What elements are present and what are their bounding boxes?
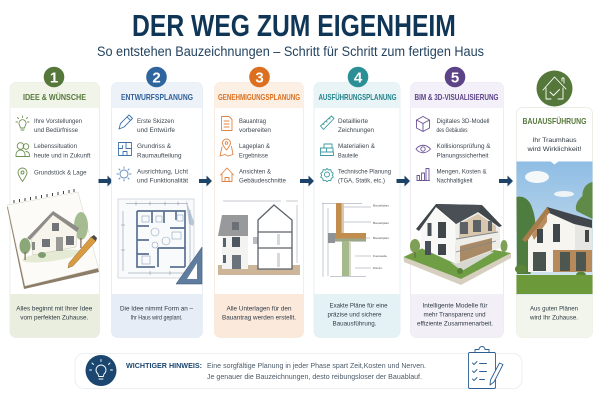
caption: vom perfekten Zuhause.	[20, 314, 88, 322]
step number 4: 4	[354, 70, 363, 86]
step number 1	[44, 67, 64, 87]
text: Grundriss: Grundriss &	[137, 143, 171, 150]
text: Traumhaus	[526, 137, 582, 153]
icon: bar chart	[417, 168, 430, 180]
caption: effiziente Zusammenarbeit.	[417, 320, 493, 328]
heading: GENEHMIGUNGSPLANUNG	[218, 93, 300, 102]
label: WICHTIGER HINWEIS:	[126, 361, 202, 370]
icon: light bulb badge	[86, 355, 116, 386]
step number 3	[249, 67, 270, 87]
illustration: sketchbook with house	[7, 189, 99, 289]
arrow 4 to 5	[396, 176, 410, 186]
caption: wird Ihr Zuhause.	[529, 314, 578, 322]
text: Mengen: Mengen, Kosten &	[436, 168, 487, 175]
icon: pencil	[119, 115, 132, 129]
icon: map pin	[220, 139, 233, 156]
panel: step 2 Entwurfsplanung: Raumaufteilung	[137, 152, 182, 159]
note text: Eine sorgfältige Planung in jeder Phase spart Zeit,Kosten und Nerven.	[207, 361, 426, 370]
illustration: 3D house model	[404, 204, 511, 285]
panel: step 2 Entwurfsplanung: und Entwürfe	[137, 127, 175, 134]
illustration: elevation and section	[218, 201, 300, 275]
panel: step 2 Entwurfsplanung	[112, 67, 202, 337]
note text: Je genauer die Bauzeichnungen, desto reibungsloser der Bauablauf.	[207, 372, 422, 381]
caption	[222, 306, 296, 322]
panel: step 2 Entwurfsplanung: und Funktionalität	[137, 178, 188, 184]
caption: Intelligente Modelle für	[422, 302, 488, 310]
icon: ruler	[320, 116, 334, 130]
text: Bauantrag: Bauantrag	[239, 118, 266, 125]
arrow 2 to 3	[199, 176, 212, 186]
text: Vorstellungen: Ihre Vorstellungen	[34, 118, 82, 125]
caption: mehr Transparenz und	[424, 312, 486, 318]
arrow 5 to 6	[499, 176, 513, 186]
illustration: construction detail	[322, 203, 389, 277]
icon: light bulb	[16, 116, 29, 130]
illustration: construction detail: Fassade	[373, 254, 387, 258]
step number 2: 2	[152, 70, 161, 86]
caption: präzise und sichere	[328, 312, 382, 318]
icon: location pin	[18, 168, 27, 182]
icon: clipboard checklist	[468, 346, 503, 388]
panel: step 3 Genehmigungsplanung: Gebäudeschnitte	[239, 178, 286, 184]
caption: Bauantrag werden erstellt.	[222, 314, 296, 322]
panel: step 4 Ausführungsplanung	[314, 67, 400, 337]
caption: Alle Unterlagen für den	[226, 306, 292, 312]
callout: Wichtiger Hinweis	[75, 346, 522, 388]
text: Materialien: Materialien &	[338, 143, 375, 150]
panel: step 4 Ausführungsplanung: Zeichnungen	[338, 127, 374, 134]
icon: people	[16, 143, 30, 156]
caption: Aus guten Plänen	[530, 306, 578, 312]
icon: document	[222, 116, 232, 130]
photo: finished house	[515, 162, 592, 295]
caption: Alles beginnt mit Ihrer Idee	[16, 306, 92, 312]
panel: step 4 Ausführungsplanung: (TGA, Statik, etc.)	[338, 178, 385, 184]
note text	[207, 361, 426, 381]
text: Traumhaus: wird Wirklichkeit!	[526, 146, 582, 153]
panel: Bauausführung	[515, 70, 592, 338]
heading: AUSFÜHRUNGSPLANUNG	[318, 92, 396, 102]
icon: floor plan	[118, 142, 132, 156]
subtitle: So entstehen Bauzeichnungen – Schritt für Schritt zum fertigen Haus	[97, 44, 484, 59]
text: 3D-Modell: Digitales 3D-Modell	[436, 118, 490, 125]
text: Ansichten: Ansichten &	[239, 168, 271, 175]
illustration: blueprint floor plan	[118, 199, 202, 284]
pointer notch	[550, 161, 559, 164]
caption: Bauausführung.	[332, 320, 377, 328]
text: Traumhaus: Ihr Traumhaus	[532, 137, 577, 144]
step number 3: 3	[255, 70, 264, 86]
text: Detaillierte: Detaillierte	[338, 118, 368, 125]
panel: step 1 Idee und Wünsche: und Bedürfnisse	[34, 127, 78, 134]
heading: BIM & 3D-VISUALISIERUNG	[414, 93, 498, 102]
heading: ENTWURFSPLANUNG	[121, 93, 193, 102]
arrow 1 to 2	[98, 176, 113, 186]
panel: step 3 Genehmigungsplanung	[214, 67, 304, 337]
caption	[417, 302, 493, 328]
illustration: construction detail: Dämm.	[373, 266, 383, 270]
panel: step 4 Ausführungsplanung: Bauteile	[338, 152, 358, 159]
caption	[328, 302, 388, 328]
heading: BAUAUSFÜHRUNG	[522, 116, 586, 126]
panel: step 1 Idee und Wünsche	[7, 67, 100, 337]
icon: sun	[117, 167, 131, 181]
title: DER WEG ZUM EIGENHEIM	[132, 9, 456, 43]
caption: Ihr Haus wird geplant.	[130, 314, 183, 322]
text: Lageplan: Lageplan &	[239, 143, 270, 150]
caption	[120, 306, 193, 322]
badge: house with check	[536, 70, 572, 106]
panel: step 1 Idee und Wünsche: heute und in Zukunft	[34, 152, 91, 159]
icon: eye	[416, 145, 430, 153]
illustration: construction detail: Bauteilplan	[373, 236, 389, 240]
text: Lebenssituation: Lebenssituation	[34, 143, 77, 150]
icon: house	[220, 168, 234, 182]
step number 4	[348, 67, 368, 87]
panel: step 5 BIM und 3D-Visualisierung	[404, 67, 511, 337]
panel: step 5 BIM und 3D-Visualisierung: des Gebäudes	[436, 127, 468, 134]
caption: Exakte Pläne für eine	[330, 302, 388, 310]
text: Kollisionsprüfung: Kollisionsprüfung &	[436, 143, 491, 150]
icon: bricks	[320, 144, 334, 156]
caption	[16, 306, 92, 322]
caption: Die Idee nimmt Form an –	[120, 306, 193, 312]
icon: gear	[321, 168, 333, 182]
panel: step 3 Genehmigungsplanung: Ergebnisse	[239, 152, 268, 159]
heading: IDEE & WÜNSCHE	[23, 92, 86, 102]
text: Skizzen: Erste Skizzen	[137, 118, 174, 125]
step number 2	[146, 67, 167, 87]
text: Ausrichtung: Ausrichtung, Licht	[137, 168, 188, 175]
text: Grundstück: Grundstück & Lage	[34, 170, 87, 176]
illustration: construction detail: Bauteilplan	[373, 221, 389, 225]
panel: step 5 BIM und 3D-Visualisierung: Nachhaltigkeit	[436, 178, 473, 184]
illustration: construction detail: Bauteilplan	[373, 204, 389, 208]
panel: step 5 BIM und 3D-Visualisierung: Planungssicherheit	[436, 152, 489, 159]
step number 5: 5	[451, 70, 459, 86]
icon: 3D cube	[416, 116, 430, 132]
step number 5	[445, 67, 465, 87]
step number 1: 1	[50, 70, 58, 86]
caption	[529, 306, 578, 322]
arrow 3 to 4	[300, 176, 314, 186]
panel: step 3 Genehmigungsplanung: vorbereiten	[239, 127, 271, 134]
text: Technische Planung: Technische Planung	[338, 168, 391, 175]
